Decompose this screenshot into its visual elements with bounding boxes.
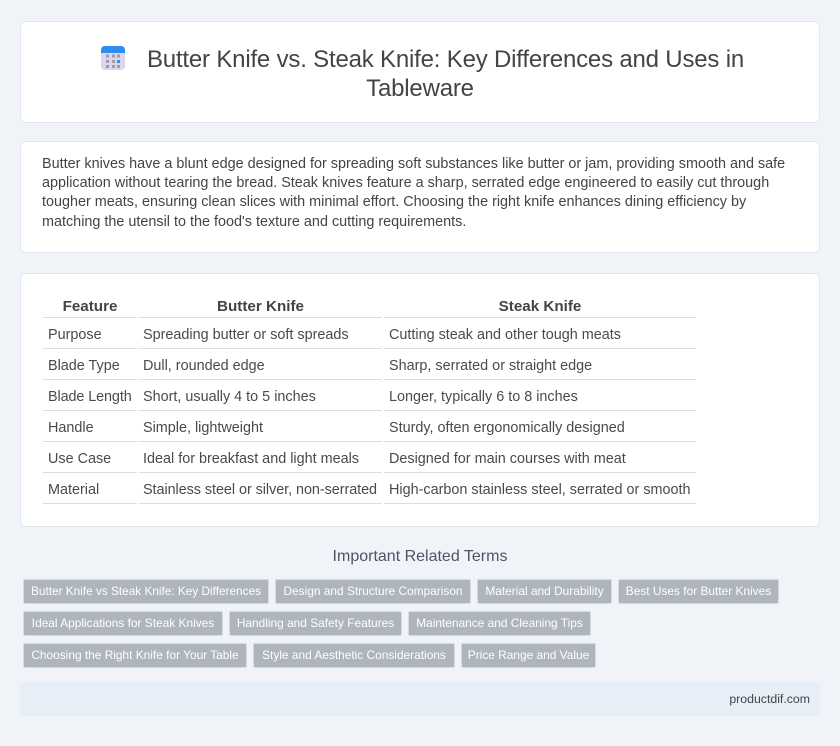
icon: calendar [101,46,125,70]
row: blade type: Blade Type [48,358,120,374]
tag: Material and Durability [485,584,604,598]
table: comparison [43,298,696,504]
row: use case: Use Case [48,451,111,467]
heading: related terms: Important Related Terms [333,548,507,565]
text block: intro: application without tearing the bread. Steak knives feature a sharp, serrated edge engineered to easily cut through [42,175,769,191]
tag [253,643,455,668]
row: purpose [48,327,621,343]
related term tags [23,579,779,668]
tag: Handling and Safety Features [237,616,394,630]
row: use case: Ideal for breakfast and light meals [143,451,359,467]
tag: Best Uses for Butter Knives [626,584,771,598]
row: blade type [48,358,592,374]
tag: Maintenance and Cleaning Tips [416,616,583,630]
tag: Style and Aesthetic Considerations [262,648,446,662]
title: Tableware [366,75,474,102]
row: material: Stainless steel or silver, non-serrated [143,482,377,498]
tag [23,611,223,636]
tag [477,579,612,604]
title: Butter Knife vs. Steak Knife: Key Differences and Uses in [147,46,744,73]
table header: Butter Knife [217,298,304,315]
table header [63,298,581,315]
row: handle: Sturdy, often ergonomically designed [389,420,625,436]
panel: title card [20,21,820,123]
tag: Ideal Applications for Steak Knives [32,616,214,630]
row: material [48,482,691,498]
text block: intro: matching the utensil to the food's texture and cutting requirements. [42,214,466,230]
panel: intro text [20,141,820,253]
text block: intro: Butter knives have a blunt edge designed for spreading soft substances like butter or jam, providing smooth and safe [42,156,785,172]
footer: source: productdif.com [729,692,810,706]
row: handle: Simple, lightweight [143,420,263,436]
tag [23,579,269,604]
tag [408,611,591,636]
row: blade length: Longer, typically 6 to 8 inches [389,389,578,405]
row: blade type: Dull, rounded edge [143,358,265,374]
table header: Feature [63,298,117,315]
row: blade length: Blade Length [48,389,132,405]
tag [618,579,779,604]
tag [23,643,247,668]
panel: comparison table [20,273,820,527]
row: material: High-carbon stainless steel, serrated or smooth [389,482,691,498]
row: purpose: Cutting steak and other tough meats [389,327,621,343]
row: purpose: Spreading butter or soft spreads [143,327,349,343]
text block: intro: tougher meats, ensuring clean slices with minimal effort. Choosing the right knife enhances dining efficiency by [42,194,746,210]
footer bar [20,682,820,716]
tag [229,611,402,636]
tag [461,643,596,668]
tag: Butter Knife vs Steak Knife: Key Differences [31,584,261,598]
row: use case [48,451,626,467]
text block: intro [42,156,785,230]
row: handle [48,420,625,436]
row: use case: Designed for main courses with meat [389,451,626,467]
table header: Steak Knife [499,298,581,315]
row: blade type: Sharp, serrated or straight edge [389,358,592,374]
tag: Design and Structure Comparison [283,584,463,598]
tag: Choosing the Right Knife for Your Table [31,648,239,662]
tag: Price Range and Value [468,648,589,662]
title [147,46,744,102]
row: handle: Handle [48,420,94,436]
row: blade length: Short, usually 4 to 5 inches [143,389,316,405]
tag [275,579,471,604]
row: material: Material [48,482,99,498]
row: blade length [48,389,578,405]
row: purpose: Purpose [48,327,102,343]
